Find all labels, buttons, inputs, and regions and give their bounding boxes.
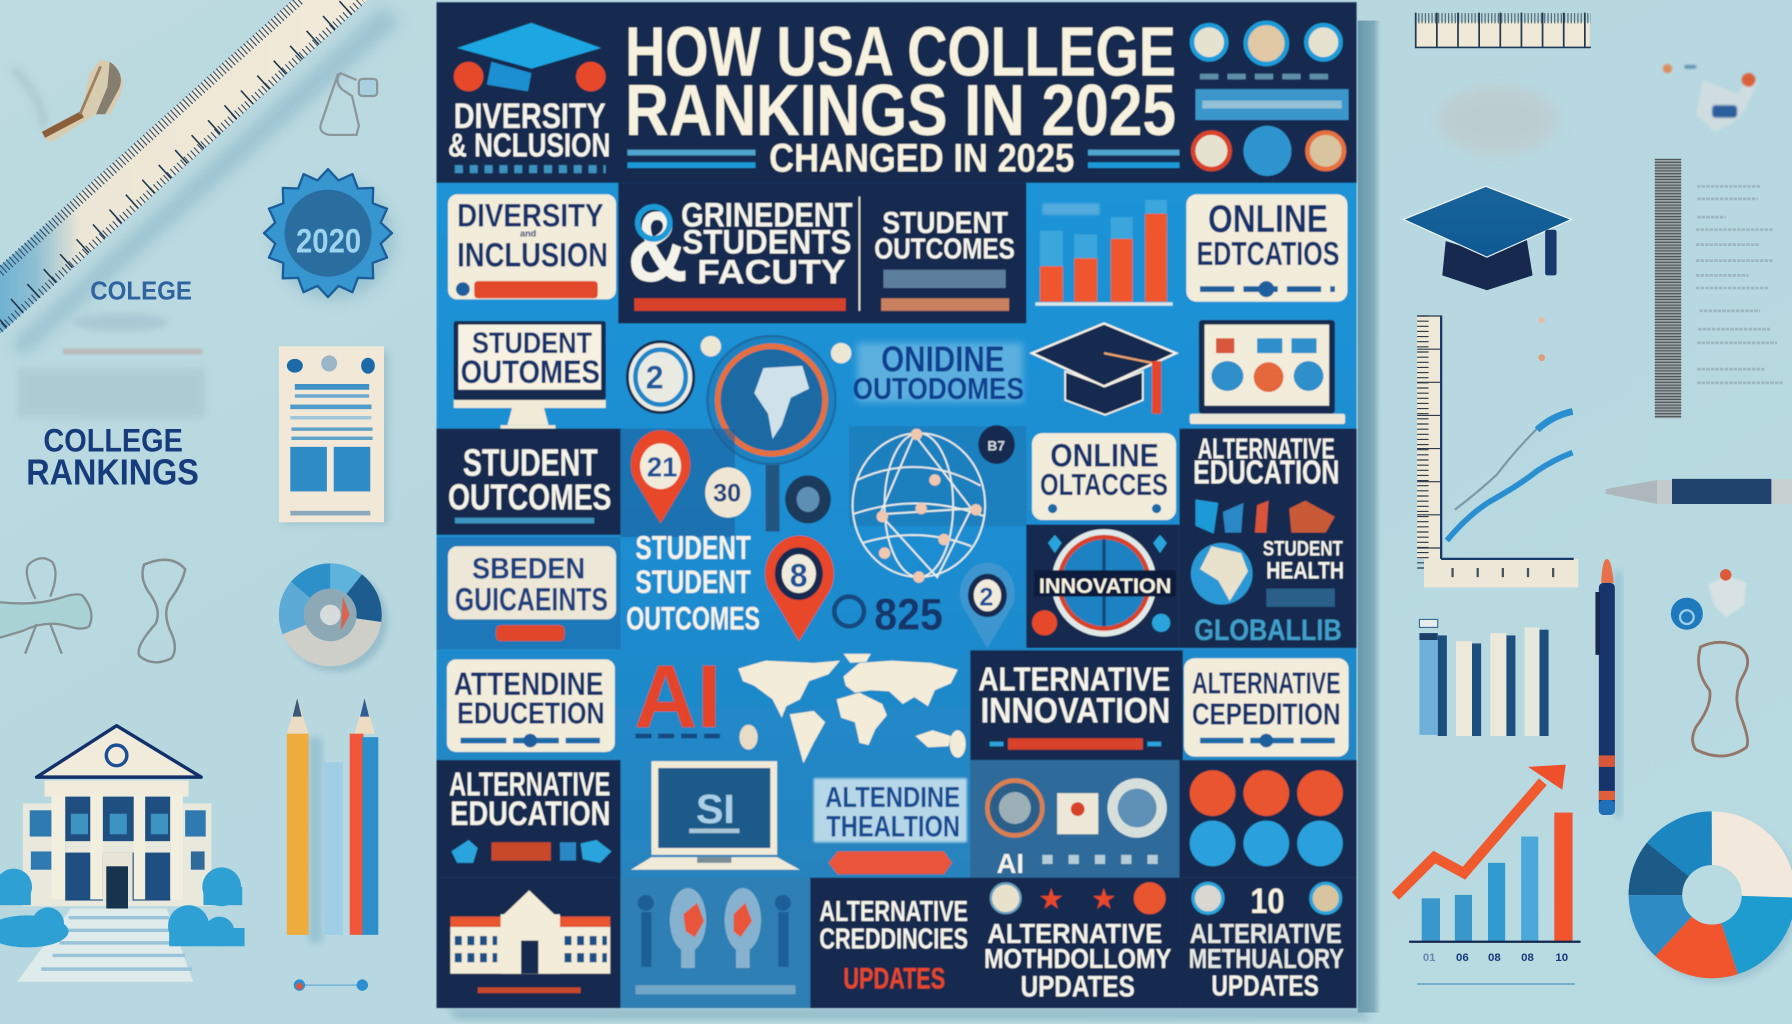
faded note text (1696, 186, 1783, 383)
card: diversity and inclusion: INCLUSION (457, 236, 608, 274)
panel: students and faculty: STUDENT (882, 205, 1008, 240)
graduation cap right (1403, 186, 1571, 290)
panel: alternative education and student health: GLOBALLIB (1194, 614, 1342, 647)
card: attendine education (447, 659, 615, 752)
network globe (849, 425, 1026, 583)
heading: student student outcomes: OUTCOMES (626, 601, 760, 637)
card: alternative health: ALTENDINE (825, 782, 960, 814)
pen horizontal (1606, 479, 1792, 504)
heading: student student outcomes (626, 530, 760, 637)
card: student guidance (437, 537, 621, 649)
icon: graduation cap centre (1032, 323, 1176, 415)
icon: monitor student outcomes: OUTOMES (461, 354, 600, 390)
panel: alternative methodology updates (984, 878, 1179, 1008)
measuring tape (0, 0, 400, 357)
panel: alternative education and student health: EDUCATION (1193, 454, 1339, 491)
centre darker zone with map pins: 21 (647, 452, 677, 483)
bar chart with rising arrow: 06 (1456, 952, 1469, 964)
card: online oltacces: ONLINE (1050, 437, 1159, 473)
world map (738, 654, 966, 763)
subtitle (627, 136, 1179, 180)
binder clip left (0, 558, 91, 654)
classical college building (0, 726, 245, 982)
panel: alternative credencies updates: UPDATES (843, 963, 945, 996)
subtitle: CHANGED IN 2025 (769, 136, 1074, 180)
hatched grey bar (1655, 159, 1681, 418)
faded smudge (1438, 86, 1557, 154)
pen vertical (1595, 559, 1622, 817)
card: online education: ONLINE (1208, 198, 1328, 241)
panel: students and faculty (618, 183, 1026, 323)
bar chart: rising bars (1035, 200, 1173, 304)
card: diversity and inclusion (448, 194, 616, 299)
panel: students and faculty: GRINEDENT (681, 196, 853, 234)
icon: map pin eight: 8 (790, 557, 808, 593)
panel: alternative education and student health: HEALTH (1266, 557, 1344, 584)
panel: alternative methualory updates: METHUALORY (1189, 943, 1344, 974)
icon: blue map pin: 2 (979, 584, 993, 612)
centre darker zone with map pins (621, 429, 831, 537)
network globe: B7 (987, 438, 1005, 453)
panel: alternative methodology updates: ★ (1093, 885, 1116, 913)
panel: students and faculty: OUTCOMES (874, 233, 1015, 265)
panel: alternative methualory updates: ALTERIATIVE (1190, 918, 1342, 949)
panel: student outcomes (437, 429, 621, 535)
panel: alternative methualory updates (1179, 878, 1357, 1008)
card: alternative cepedition: ALTERNATIVE (1192, 666, 1341, 701)
header left label (448, 96, 610, 169)
panel: alternative methodology updates: ALTERNATIVE (987, 918, 1162, 949)
panel: alternative innovation: ALTERNATIVE (978, 661, 1170, 698)
bar chart small (1419, 619, 1549, 736)
title: HOW USA COLLEGE (625, 12, 1176, 90)
panel shadow (446, 21, 1381, 1019)
card: diversity and inclusion: DIVERSITY (457, 197, 603, 233)
icon: monitor student outcomes (454, 321, 606, 430)
title: RANKINGS IN 2025 (625, 71, 1176, 151)
card: attendine education: ATTENDINE (454, 666, 603, 702)
panel: alternative methodology updates: UPDATES (1021, 971, 1135, 1004)
card: diversity and inclusion: and (520, 229, 536, 239)
heading: student student outcomes: STUDENT (635, 530, 751, 567)
small blue knob and scrap (1671, 569, 1746, 630)
title (625, 12, 1176, 151)
panel: alternative education and student health (1179, 429, 1357, 648)
panel: alternative innovation: INNOVATION (981, 690, 1170, 730)
panel: alternative credencies updates (810, 878, 984, 1008)
bar chart with rising arrow: 01 (1423, 952, 1436, 964)
line chart with ruler axes (1417, 315, 1578, 587)
panel: alternative innovation (970, 650, 1183, 760)
college rankings label: RANKINGS (26, 452, 199, 493)
main poster panel (437, 2, 1357, 1008)
card: online oltacces (1032, 433, 1176, 520)
panel: alternative education and student health: STUDENT (1263, 535, 1343, 560)
2020 badge: 2020 (296, 223, 361, 261)
card: student guidance: GUICAEINTS (455, 581, 608, 617)
card: online oltacces: OLTACCES (1040, 467, 1168, 502)
panel: school building (437, 878, 621, 1008)
icon: laptop centre (631, 761, 800, 870)
card: alternative health: THEALTION (826, 811, 960, 844)
header band (437, 2, 1357, 183)
college rankings label (26, 422, 199, 493)
card: alternative cepedition (1184, 658, 1349, 757)
card: online education (1186, 194, 1347, 302)
2020 badge (264, 169, 393, 299)
heading: online outcomes: ONIDINE (881, 338, 1005, 379)
header left label: DIVERSITY (454, 96, 606, 136)
card: alternative cepedition: CEPEDITION (1192, 697, 1341, 732)
heading: online outcomes (853, 338, 1024, 406)
panel: alternative methodology updates: ★ (1040, 885, 1063, 913)
panel: six coloured circles (1179, 760, 1357, 878)
icon: laptop centre: SI (696, 786, 735, 832)
binder clip scrap (14, 59, 123, 142)
panel: alternative methodology updates: MOTHDOLLOMY (984, 943, 1171, 974)
bar chart with rising arrow: 08 (1488, 952, 1501, 964)
paper clip top (320, 73, 377, 135)
panel: alternative methualory updates: 10 (1250, 881, 1285, 921)
faded college label (17, 275, 206, 418)
college rankings label: COLLEGE (43, 422, 183, 458)
panel: ai icons (970, 760, 1179, 879)
card: alternative health (814, 778, 967, 874)
panel: students and faculty: FACUTY (697, 253, 846, 291)
year text 825: 825 (874, 591, 943, 640)
faded college label: COLEGE (90, 275, 192, 305)
text: AI: AI (634, 646, 721, 746)
centre darker zone with map pins: 30 (713, 480, 741, 508)
panel: alternative education dark: EDUCATION (450, 795, 610, 833)
card: student guidance: SBEDEN (472, 552, 585, 585)
panel: figures (621, 878, 810, 1008)
panel: ai icons: AI (997, 848, 1024, 879)
panel: alternative credencies updates: CREDDINCIES (819, 924, 968, 956)
header right icons (1192, 23, 1349, 176)
panel: student outcomes: OUTCOMES (448, 477, 611, 518)
icon: map pin eight (765, 536, 834, 641)
panel: alternative education dark (437, 760, 621, 878)
panel: alternative methualory updates: UPDATES (1211, 970, 1319, 1002)
icon: laptop dashboard (1190, 320, 1345, 424)
bar chart with rising arrow (1395, 765, 1581, 984)
heading: student student outcomes: STUDENT (635, 564, 751, 600)
panel: innovation (1026, 525, 1179, 648)
icon: magnifier globe (707, 336, 835, 531)
icon: monitor student outcomes: STUDENT (472, 327, 592, 360)
panel: student outcomes: STUDENT (463, 441, 598, 483)
panel: alternative credencies updates: ALTERNATIVE (819, 896, 968, 928)
card: attendine education: EDUCETION (457, 695, 605, 730)
panel: innovation: INNOVATION (1039, 573, 1171, 598)
small donut chart (285, 569, 387, 672)
donut chart large (1634, 818, 1792, 983)
header left label: & NCLUSION (448, 128, 610, 165)
pencils (287, 698, 378, 991)
bar chart with rising arrow: 10 (1555, 952, 1568, 964)
scribble icon top right (1663, 64, 1758, 131)
text: AI (634, 646, 758, 750)
card: online education: EDTCATIOS (1197, 236, 1339, 273)
icon: numbered badge (627, 336, 851, 413)
binder clip middle (139, 560, 185, 662)
icon: numbered badge: 2 (646, 360, 664, 396)
ruler top right (1415, 18, 1591, 47)
rubber band (1693, 642, 1748, 756)
panel: students and faculty: & (627, 191, 688, 303)
heading: online outcomes: OUTODOMES (853, 371, 1024, 406)
icon: header graduation cap (454, 23, 606, 91)
year text 825 (834, 591, 943, 640)
report sheet (279, 346, 389, 525)
bar chart with rising arrow: 08 (1521, 952, 1534, 964)
panel: students and faculty: STUDENTS (682, 224, 851, 262)
panel: alternative education and student health: ALTERNATIVE (1198, 433, 1335, 465)
icon: blue map pin (960, 563, 1015, 648)
panel: alternative education dark: ALTERNATIVE (449, 766, 610, 803)
